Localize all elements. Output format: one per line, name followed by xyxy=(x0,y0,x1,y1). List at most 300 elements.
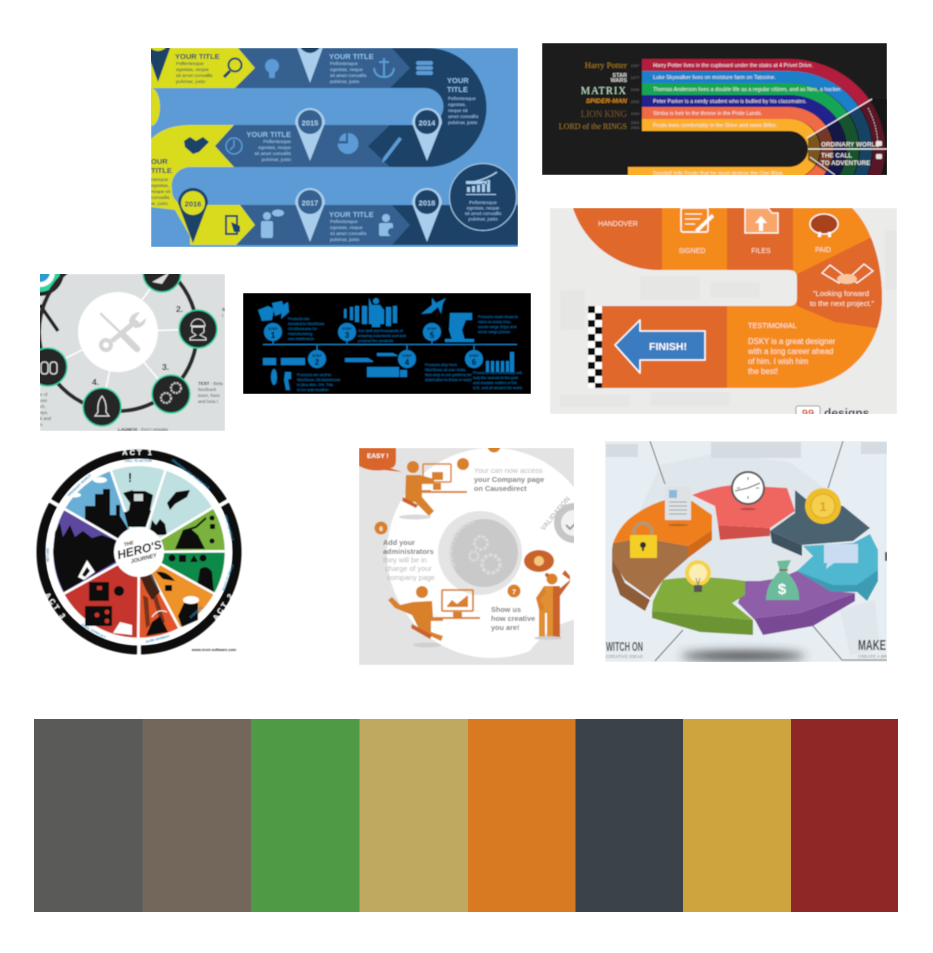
block: left yellow text: OUR xyxy=(151,157,168,166)
white disk xyxy=(387,448,597,658)
road labels: FILES xyxy=(751,248,771,255)
chart badge xyxy=(450,164,516,230)
step text: creative: you are! xyxy=(491,623,519,632)
centre logo: HERO'S xyxy=(116,538,163,562)
film logos: MATRIX xyxy=(581,86,627,97)
block: right curve text: TITLE xyxy=(447,85,468,94)
wedge titles: CALL TO ACTION xyxy=(124,459,152,463)
block: right curve text xyxy=(447,76,479,126)
centre logo: JOURNEY xyxy=(130,553,159,565)
testimonial text: with a long career ahead xyxy=(747,347,833,356)
icon: piggy bank xyxy=(810,214,838,237)
step descriptions: LAUNCH - Don't mistake xyxy=(118,427,169,432)
wedge: belly of the whale xyxy=(139,507,226,552)
faint world map xyxy=(640,452,880,655)
block: row two text: pulvinar, justo xyxy=(262,157,291,163)
step paragraphs: ocean cargo ships and xyxy=(478,325,516,329)
step text: company page xyxy=(474,466,544,493)
step marker top xyxy=(488,440,500,452)
wedge: ordinary world xyxy=(64,470,139,552)
pin: 2018 xyxy=(412,188,442,242)
pin: top xyxy=(296,48,324,83)
icon: database xyxy=(416,61,433,75)
pin: 2017: 2017 xyxy=(302,198,318,208)
callout: easy: EASY ! xyxy=(367,453,389,460)
step text: administrators: Add your xyxy=(383,538,415,547)
step badge labels: 6 xyxy=(472,358,477,367)
act labels: ACT 3 xyxy=(43,591,68,622)
step paragraphs: Products ship from xyxy=(425,363,457,367)
block: right curve text: egestas, xyxy=(448,102,466,108)
step paragraphs: is our sole location xyxy=(297,388,328,392)
icon: document xyxy=(665,486,691,526)
dark road curve xyxy=(360,48,486,167)
block: bottom middle text: YOUR TITLE xyxy=(329,210,374,219)
block: top middle text: pulvinar, justo xyxy=(330,79,360,85)
chart badge: pulvinar, justo xyxy=(468,216,498,222)
step descriptions: s. xyxy=(40,422,44,427)
step paragraphs: help the women in the port xyxy=(473,376,519,380)
wedge titles: GODDESS xyxy=(189,605,204,619)
step text: creative: Show us xyxy=(491,605,521,614)
film years: 1999 xyxy=(631,88,639,92)
film logos xyxy=(559,60,627,131)
figure: person at company page xyxy=(402,458,469,516)
step paragraphs: Non-stop to our partners for xyxy=(425,373,472,377)
block: top middle text: sit amet convallis xyxy=(330,73,367,79)
step paragraphs xyxy=(288,315,522,392)
step text: creative: how creative xyxy=(491,614,535,623)
caption: switch on: WITCH ON xyxy=(606,640,643,654)
film years xyxy=(631,64,639,130)
segment: teal xyxy=(797,534,878,601)
segment: purple xyxy=(738,571,855,635)
step text: administrators: company page xyxy=(387,573,435,582)
step badge 6: 6 xyxy=(379,526,383,533)
block: bottom middle text: sit amet convallis xyxy=(330,231,367,237)
step paragraphs: need on every ship, xyxy=(478,320,511,324)
block: row two text xyxy=(246,130,292,163)
icon: clock xyxy=(732,472,764,510)
panel: black and blue logistics timeline xyxy=(243,293,531,394)
road row two xyxy=(151,125,390,245)
ring labels xyxy=(821,142,880,167)
step descriptions: t xyxy=(222,313,224,318)
block: row two text: Pellentesque xyxy=(263,139,291,145)
icon: plane and ship xyxy=(421,298,474,342)
step badge labels: STEP xyxy=(312,354,322,358)
handshake quote: "Looking forward xyxy=(813,289,869,298)
wedge: call to action xyxy=(111,465,166,552)
block: row two text: sit amet convallis xyxy=(254,151,292,157)
99designs logo xyxy=(796,406,870,420)
film logos: LION KING xyxy=(581,109,627,119)
block: left yellow text: convallis xyxy=(151,195,170,201)
icon: money bag xyxy=(766,560,799,600)
colour palette xyxy=(34,719,898,912)
block: yellow top text: YOUR TITLE xyxy=(175,52,220,61)
band captions: Harry Potter lives in the cupboard under the stairs at 4 Privet Drive. xyxy=(653,63,813,69)
icon: signed document xyxy=(681,208,714,232)
icon: padlock xyxy=(630,523,657,558)
block: top middle text xyxy=(329,52,374,85)
act labels xyxy=(43,448,236,622)
step descriptions: use xyxy=(40,398,48,403)
road labels: SIGNED xyxy=(679,248,705,255)
timeline axis with connectors xyxy=(263,332,517,359)
film logos: SPIDER-MAN xyxy=(586,98,627,105)
act labels: ACT 1 xyxy=(122,448,154,457)
film years: 1994 xyxy=(631,112,639,116)
step descriptions: sh, xyxy=(40,404,46,409)
band captions: Simba is heir to the throne in the Pride Lands. xyxy=(653,111,762,117)
block: right curve text: neque sit xyxy=(448,108,468,114)
step badges xyxy=(264,323,483,368)
99designs logo: designs xyxy=(824,406,870,420)
block: row two text: egestas, neque xyxy=(258,145,291,151)
step badge labels: STEP xyxy=(342,327,352,331)
wedge: crossing the threshold xyxy=(139,469,214,552)
segment: slate xyxy=(770,490,870,556)
step paragraphs: Products are sent to xyxy=(297,373,331,377)
block: yellow top text xyxy=(175,52,220,85)
icon: pie chart xyxy=(338,133,358,154)
band captions: Peter Parker is a nerdy student who is bullied by his classmates. xyxy=(653,99,807,105)
step text: administrators: administrators xyxy=(383,547,434,556)
management hub xyxy=(438,510,522,596)
step badge labels: STEP xyxy=(268,327,278,331)
ring labels: TO ADVENTURE xyxy=(821,160,870,167)
caption: make: MAKE xyxy=(858,637,886,654)
step text: administrators xyxy=(383,538,435,582)
testimonial text xyxy=(747,321,836,376)
wedge: meeting with the goddess xyxy=(139,552,215,629)
caption: make: CREATE A BR xyxy=(858,654,888,659)
step paragraphs: in Blue Ash, OH. This xyxy=(297,383,333,387)
act labels: ACT 2 xyxy=(211,591,236,622)
step paragraphs: Products from MedShare will xyxy=(473,371,522,375)
block: yellow top text: Pellentesque xyxy=(176,61,204,67)
step paragraphs: donated to MedShare xyxy=(288,322,325,326)
icon: coin: 1 xyxy=(819,499,827,514)
shadow under second figure xyxy=(413,642,441,648)
block: top middle text: Pellentesque xyxy=(330,61,358,67)
icon: upload folder xyxy=(745,208,778,233)
outer act ring xyxy=(40,454,238,660)
step descriptions: ays, xyxy=(40,410,48,415)
wedge titles: FINAL CONFLICT xyxy=(81,623,106,639)
block: left yellow text xyxy=(151,157,172,207)
wedge titles: CROSSING THE THRESHOLD xyxy=(171,458,211,490)
step descriptions: TEST - Beta xyxy=(198,381,223,386)
step descriptions: feedback xyxy=(198,387,217,392)
step text: administrators: they will be in xyxy=(383,556,427,564)
panel: causedirect management steps xyxy=(359,448,574,665)
step descriptions: S xyxy=(222,307,225,312)
band captions: Thomas Anderson lives a double life as a regular citizen, and as Neo, a hacker. xyxy=(653,87,842,93)
chart badge: egestas, neque xyxy=(467,206,500,212)
step text: creative xyxy=(491,605,535,632)
step badge labels: 1 xyxy=(271,331,276,340)
block: top middle text: egestas, neque xyxy=(330,67,363,73)
block: bottom middle text: egestas, neque xyxy=(330,225,363,231)
block: left yellow text: ntesque xyxy=(151,177,168,183)
connector lines xyxy=(650,441,887,661)
step paragraphs: process the products xyxy=(358,339,393,343)
centre hub with tools xyxy=(78,292,158,372)
pin: 2016: 2016 xyxy=(185,200,201,208)
film years: 2001 xyxy=(631,121,639,125)
wedge divider lines xyxy=(807,99,887,175)
dark wedge overlay xyxy=(807,98,887,175)
step paragraphs: MedShare all over India. xyxy=(425,368,466,372)
figure: thinking person xyxy=(524,550,570,638)
caption: switch on: CREATIVE IDEAS xyxy=(606,654,643,659)
step descriptions: e of xyxy=(40,392,48,397)
panel: product cycle wheel xyxy=(16,248,225,432)
icon: money bag: $ xyxy=(778,581,787,598)
diagonal bar xyxy=(40,305,58,331)
step badge labels: STEP xyxy=(427,327,437,331)
pin: 2018: 2018 xyxy=(419,198,435,208)
step paragraphs: some cargo planes xyxy=(478,330,510,334)
road labels xyxy=(598,221,831,255)
step badge 6 xyxy=(374,522,388,534)
step paragraphs: and distribution xyxy=(288,337,314,341)
wedge titles: ORDINARY WORLD xyxy=(67,473,92,497)
band captions: Luke Skywalker lives on moisture farm on Tatooine. xyxy=(653,75,776,81)
film years: 2002 xyxy=(631,100,639,104)
wedge titles xyxy=(46,458,235,644)
block: left yellow text: TITLE xyxy=(151,166,172,175)
segment: red xyxy=(692,485,795,540)
handshake quote: to the next project." xyxy=(810,299,875,308)
node: binoculars xyxy=(29,348,67,386)
block: top middle text: YOUR TITLE xyxy=(329,52,374,61)
film years: 2003 xyxy=(631,126,639,130)
step paragraphs: manufacturing xyxy=(288,332,312,336)
icon: magnifier xyxy=(224,58,242,77)
step descriptions: and beta t xyxy=(198,399,219,404)
block: right curve text: pulvinar, justo xyxy=(448,120,478,126)
icon: user with coin xyxy=(379,214,396,236)
wedge: return xyxy=(52,508,139,594)
step numbers: 3. xyxy=(162,362,169,372)
road labels: PAID xyxy=(815,247,831,254)
step paragraphs: Products are xyxy=(288,317,310,321)
icon: lined people xyxy=(486,352,514,372)
icon: tablet xyxy=(226,216,240,234)
pin: 2015 xyxy=(295,108,325,161)
segment: orange xyxy=(613,500,712,558)
wedge: dark moment xyxy=(138,552,180,639)
checkered flag xyxy=(588,306,602,388)
film logos: LORD of the RINGS xyxy=(559,122,627,131)
step badge labels: STEP xyxy=(469,354,479,358)
segment: brown xyxy=(612,538,688,611)
icon: handshake xyxy=(184,137,209,154)
step text: administrators: charge of your xyxy=(385,564,432,573)
management hub: MANAGEMENT xyxy=(450,522,474,566)
pin: 2016 xyxy=(178,188,208,243)
caption: make xyxy=(858,637,888,659)
step descriptions xyxy=(40,307,225,432)
step badge labels: STEP xyxy=(402,354,412,358)
step paragraphs: Oil Wholesale for xyxy=(288,327,318,331)
icon: crowd xyxy=(344,298,397,327)
panel: winding blue and yellow timeline xyxy=(151,48,518,247)
icon: warehouse boxes and people xyxy=(263,358,305,390)
film logos: WARS xyxy=(610,78,627,84)
wedge titles: RETURN xyxy=(46,548,50,562)
wedge: final conflict xyxy=(63,552,139,639)
icon: light bulb xyxy=(685,560,711,592)
segment: green xyxy=(652,577,753,635)
film years: 1997 xyxy=(631,64,639,68)
centre logo: THE xyxy=(123,540,135,548)
validation badge xyxy=(540,496,594,543)
step paragraphs: distribution to those in need xyxy=(425,378,471,382)
pin: top left xyxy=(151,48,171,82)
pin: 2014 xyxy=(412,108,442,161)
validation badge: VALIDATION xyxy=(540,496,572,532)
icon: anchor xyxy=(374,58,394,77)
shadow under thinking figure xyxy=(534,636,562,640)
panel: 3D ring business infographic xyxy=(605,441,888,662)
step badge labels: 4 xyxy=(405,358,410,367)
node: worker xyxy=(179,310,217,348)
step paragraphs: U.S. and all around the world xyxy=(473,386,522,390)
icon: handshake xyxy=(822,264,873,284)
icon: coin xyxy=(805,488,841,524)
step paragraphs: and disaster victims of the xyxy=(473,381,517,385)
block: row two text: YOUR TITLE xyxy=(246,130,291,139)
icon: bulb xyxy=(265,59,279,78)
step paragraphs: MedShare Oil Warehouse xyxy=(297,378,341,382)
block: left yellow text: ar, justo xyxy=(151,201,168,207)
block: left yellow text: egestas, xyxy=(151,183,169,189)
pin: 2015: 2015 xyxy=(302,118,318,128)
target rings xyxy=(16,248,64,296)
block: bottom middle text: pulvinar, justo xyxy=(330,237,360,243)
wedge: call to action: ! xyxy=(128,470,132,485)
wedge titles: ROAD OF TRIALS xyxy=(221,563,235,592)
rainbow bands xyxy=(627,58,886,175)
panel: orange finish road xyxy=(550,208,897,420)
step paragraphs: Our staff and thousands of xyxy=(358,329,404,333)
icon: clothes and supplies xyxy=(258,301,289,321)
band captions: Frodo lives comfortably in the Shire and owns Bilbo. xyxy=(653,123,777,129)
node: top xyxy=(143,254,181,292)
road labels: HANDOVER xyxy=(598,221,638,228)
step descriptions: k and xyxy=(40,416,52,421)
block: yellow top text: pulvinar, justo xyxy=(176,79,206,85)
step text: company page: your Company page xyxy=(474,475,544,484)
wedge: road of trials xyxy=(139,551,226,594)
99designs logo: 99 xyxy=(802,408,814,420)
chart badge: Pellentesque xyxy=(469,200,497,206)
pin: 2017 xyxy=(295,188,325,242)
block: left yellow text: neque sit xyxy=(151,189,171,195)
pin: 2014: 2014 xyxy=(419,118,436,128)
step paragraphs: Products reach those in xyxy=(478,315,518,319)
centre logo xyxy=(114,527,165,577)
node: gears xyxy=(152,375,190,413)
step numbers: 4. xyxy=(92,377,99,387)
icon: person with speech bubble xyxy=(261,210,284,238)
step numbers xyxy=(92,304,183,387)
wedge titles: INTO THE BELLY xyxy=(223,514,235,542)
film logos: Harry Potter xyxy=(585,60,627,70)
wheel spokes xyxy=(48,273,198,407)
finish arrow xyxy=(615,320,705,373)
website credit: www.revel-software.com xyxy=(191,648,237,652)
edge text fragment xyxy=(885,552,887,561)
icon: clock xyxy=(226,138,242,154)
testimonial text: of him. I wish him xyxy=(748,357,808,366)
step badge labels xyxy=(268,327,479,367)
step badge labels: 2 xyxy=(315,358,320,367)
block: yellow top text: sit amet convallis xyxy=(176,73,213,79)
panel: the hero's journey wheel xyxy=(40,448,238,660)
testimonial text: TESTIMONIAL xyxy=(748,321,797,330)
block: yellow top text: egestas, neque xyxy=(176,67,209,73)
step badge labels: 5 xyxy=(430,331,435,340)
step text: company page: Your can now access xyxy=(474,466,543,475)
step badge labels: 3 xyxy=(345,331,350,340)
block: right curve text: amet convallis xyxy=(448,114,479,120)
wedge backdrop mask xyxy=(46,460,232,644)
wheel ring xyxy=(39,253,197,411)
step numbers: 2. xyxy=(176,304,183,314)
figure: person at chart screen xyxy=(388,586,480,641)
finish arrow: FINISH! xyxy=(649,341,687,353)
band captions xyxy=(653,63,842,177)
floor shadow xyxy=(681,652,805,660)
node: rocket xyxy=(83,388,121,426)
step badge 7 xyxy=(508,584,520,598)
band captions: Gandalf tells Frodo that he must destroy the One Ring. xyxy=(653,171,784,177)
film logos: STAR xyxy=(612,73,627,79)
ring icons xyxy=(876,141,882,159)
ring labels: ORDINARY WORLD xyxy=(821,142,880,148)
faint background doodles xyxy=(560,230,897,407)
step paragraphs: amazing volunteers sort and xyxy=(358,334,406,338)
lower right shape xyxy=(520,620,574,665)
step descriptions: team, fixes xyxy=(198,393,221,398)
icon: pencil xyxy=(382,137,402,163)
block: right curve text: Pellentesque xyxy=(448,96,476,102)
ring labels: THE CALL xyxy=(821,152,852,160)
road xyxy=(550,208,897,414)
caption: switch on xyxy=(606,640,643,659)
shadow under first figure xyxy=(399,514,431,520)
chart badge: sit amet convallis xyxy=(465,211,502,217)
testimonial text: DSKY is a great designer xyxy=(748,337,836,346)
header text bars xyxy=(606,442,887,458)
film years: 1977 xyxy=(631,76,639,80)
block: right curve text: YOUR xyxy=(447,76,469,85)
wedge titles: DARK MOMENT xyxy=(145,634,170,644)
block: bottom middle text: Pellentesque xyxy=(330,219,358,225)
road row one xyxy=(142,48,410,126)
step text: company page: on Causedirect xyxy=(474,484,527,493)
callout: easy xyxy=(359,448,402,472)
panel: hero's journey film bands xyxy=(542,43,887,175)
icon: speech bubble xyxy=(824,544,858,569)
road row three xyxy=(190,205,518,245)
testimonial text: the best! xyxy=(748,367,778,376)
